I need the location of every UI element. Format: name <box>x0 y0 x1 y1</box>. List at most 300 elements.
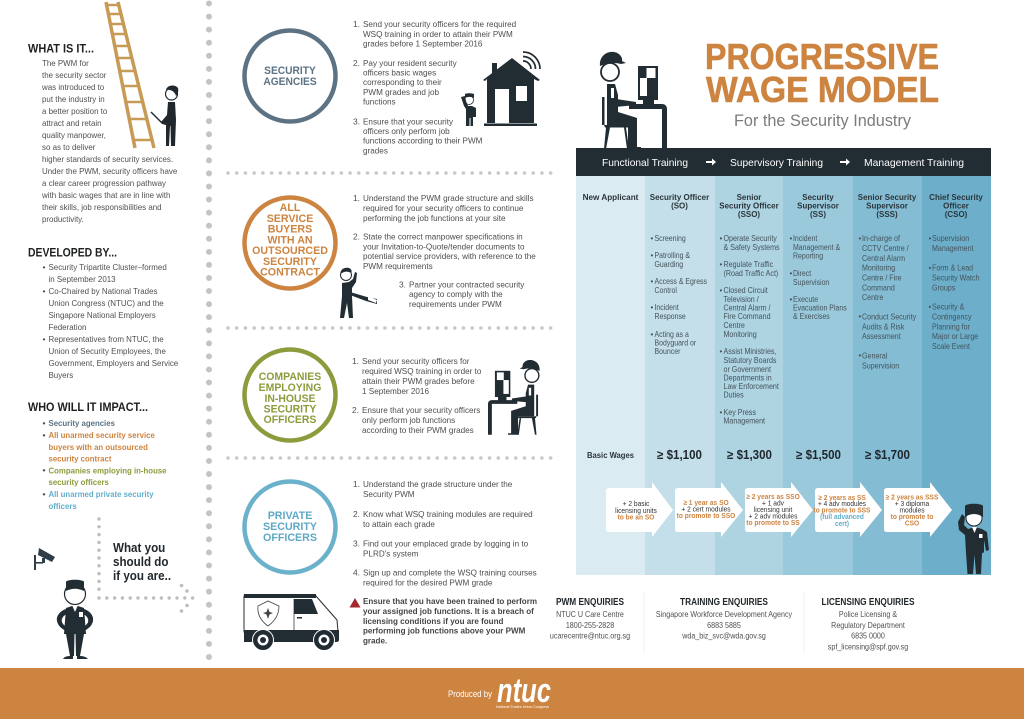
list: senior security officer duties: Closed Circuit <box>724 286 769 295</box>
table column backgrounds <box>576 176 991 575</box>
list: senior security officer duties: Regulate Traffic <box>724 260 773 269</box>
list: senior security supervisor duties: Assessment <box>862 332 902 341</box>
list: security officer duties: • <box>650 234 654 243</box>
header bar: training tracks <box>576 148 991 176</box>
text: security agencies steps: Ensure that your security <box>363 117 454 127</box>
list: chief security officer duties: Supervision <box>932 234 969 243</box>
heading: progressive wage model: PROGRESSIVE <box>705 36 939 77</box>
text: security agencies steps: WSQ training in order to attain their PWM <box>363 30 513 39</box>
text: service buyers steps: Understand the PWM grade structure and skills <box>363 194 534 203</box>
icon: security agencies circle <box>244 30 336 122</box>
panel: title <box>600 36 939 149</box>
text: what is it body: was introduced to <box>41 83 105 92</box>
text: service buyers steps: requirements under PWM <box>409 300 502 309</box>
list: who will it impact: buyers with an outsourced <box>48 443 148 452</box>
icon: guard with pointer beside ladder <box>151 86 178 146</box>
list: senior security officer duties: (Road Traffic Act) <box>724 269 779 278</box>
list: developed by: Union of Security Employees, the <box>48 347 166 356</box>
icon: private officers circle <box>244 482 336 572</box>
column headings: (CSO) <box>945 210 968 219</box>
icon: cctv camera <box>34 548 55 570</box>
text: companies steps: only perform job functions <box>362 416 455 425</box>
text: pwm enquiries: PWM ENQUIRIES <box>556 596 624 607</box>
list: senior security officer duties: Fire Command <box>724 312 771 321</box>
arrow: to security supervisor: ≥ 2 years as SSO <box>746 494 800 501</box>
text: licensing enquiries: Police Licensing & <box>839 609 898 619</box>
arrow: to senior security supervisor: + 4 adv modules <box>818 501 866 508</box>
text: security agencies steps: officers only perform job <box>363 127 450 136</box>
list: security supervisor duties: Direct <box>793 269 812 278</box>
text: service buyers steps: potential service providers, with reference to the <box>363 252 536 261</box>
list: who will it impact: • <box>42 430 46 440</box>
list: senior security supervisor duties: Conduct Security <box>862 312 916 322</box>
list: who will it impact: • <box>42 489 46 499</box>
arrow: to senior security supervisor: (full advanced <box>820 514 864 521</box>
text: subtitle: For the Security Industry <box>734 112 912 130</box>
arrow: to security supervisor: licensing unit <box>754 507 792 514</box>
column headings <box>583 193 983 219</box>
list: chief security officer duties: • <box>928 302 932 312</box>
list: senior security officer duties: & Safety Systems <box>724 243 780 252</box>
text: pwm enquiries <box>550 596 630 641</box>
icon: all service buyers circle: CONTRACT <box>260 266 320 279</box>
list: security officer duties: • <box>650 277 654 286</box>
list: developed by: Federation <box>48 323 87 332</box>
text: training enquiries: Singapore Workforce Development Agency <box>656 609 792 619</box>
list: who will it impact: officers <box>48 502 77 511</box>
text: service buyers steps: required for your security officers to continue <box>363 204 524 213</box>
arrow: dotted path to the right <box>99 519 193 613</box>
list: senior security officer duties: • <box>720 260 722 269</box>
arrow: to chief security officer: ≥ 2 years as SSS <box>886 494 939 502</box>
header bar: training tracks: Management Training <box>864 157 964 169</box>
text: private officers steps <box>353 479 537 588</box>
list: developed by: in September 2013 <box>48 275 116 284</box>
text: companies steps: Ensure that your security officers <box>362 406 480 415</box>
list: senior security officer duties: Assist Ministries, <box>724 347 776 356</box>
list: security officer duties: Acting as a <box>654 330 690 339</box>
arrow: to security supervisor: + 1 adv <box>762 500 784 508</box>
text: licensing enquiries: spf_licensing@spf.gov.sg <box>828 642 908 652</box>
list: senior security officer duties: or Government <box>724 365 772 374</box>
header bar: training tracks: Supervisory Training <box>730 157 823 169</box>
text: private officers steps: required for the desired PWM grade <box>363 578 493 588</box>
list: chief security officer duties: Groups <box>932 283 956 293</box>
arrow: to chief security officer <box>884 482 952 537</box>
icon: private officers circle: OFFICERS <box>263 532 317 544</box>
text: companies steps: 1 September 2016 <box>362 387 429 396</box>
list: who will it impact: All unarmed security service <box>48 431 155 440</box>
text: licensing enquiries: 6835 0000 <box>851 631 885 641</box>
list: senior security supervisor duties <box>858 234 916 371</box>
text: companies steps: 1. <box>352 356 359 366</box>
text: produced by: Produced by <box>448 689 492 700</box>
callout: warning: grade. <box>363 636 387 646</box>
text: private officers steps: 3. <box>353 538 360 548</box>
list: security supervisor duties: Incident <box>793 234 818 243</box>
text: private officers steps: Security PWM <box>363 490 415 499</box>
list: developed by: Representatives from NTUC, the <box>48 335 164 344</box>
list: senior security officer duties: Central Alarm / <box>724 303 771 313</box>
list: security officer duties: Control <box>654 286 677 295</box>
text: security agencies steps: corresponding to their <box>363 78 442 87</box>
row: basic wages: ≥ $1,100 <box>657 448 702 462</box>
text: private officers steps: Sign up and complete the WSQ training courses <box>363 568 537 578</box>
callout: warning: Ensure that you have been trained to perform <box>363 597 537 606</box>
list: security supervisor duties: Evacuation Plans <box>793 303 847 313</box>
text: what is it body: with basic wages that are in line with <box>41 191 171 200</box>
callout: warning <box>350 597 537 646</box>
row: basic wages <box>587 448 910 462</box>
list: senior security supervisor duties: CCTV Centre / <box>862 244 909 253</box>
logo: ntuc: ntuc <box>497 672 551 710</box>
arrow: to security supervisor: to promote to SS <box>746 520 800 527</box>
logo: ntuc: National Trades Union Congress <box>496 704 549 709</box>
text: service buyers steps: performing the job functions at your site <box>363 214 506 223</box>
list: security officer duties: • <box>650 303 654 312</box>
text: companies steps: required WSQ training in order to <box>362 367 482 376</box>
column headings: Senior Security <box>858 193 917 202</box>
list: who will it impact <box>42 418 167 511</box>
panel: companies employing in-house officers <box>244 350 540 440</box>
text: what you should do: if you are.. <box>113 569 171 583</box>
list: security supervisor duties: • <box>790 234 792 243</box>
text: what is it body: so as to deliver <box>42 143 96 152</box>
list: chief security officer duties <box>928 234 980 351</box>
text: what you should do: What you <box>113 541 165 555</box>
list: senior security officer duties <box>720 234 780 426</box>
icon: saluting guard <box>461 93 476 126</box>
text: what you should do <box>113 541 171 583</box>
icon: guard with metal detector <box>340 268 377 318</box>
text: training enquiries: TRAINING ENQUIRIES <box>680 596 768 607</box>
panel: enquiries <box>550 592 914 652</box>
text: pwm enquiries: 1800-255-2828 <box>566 620 615 630</box>
list: chief security officer duties: Security & <box>932 302 964 312</box>
text: private officers steps: PLRD's system <box>363 549 418 559</box>
list: developed by <box>42 262 179 380</box>
list: chief security officer duties: Scale Event <box>932 342 971 351</box>
arrow: to security supervisor <box>745 482 813 537</box>
callout: warning: licensing conditions if you are found <box>363 617 503 626</box>
list: chief security officer duties: Major or Large <box>932 332 978 341</box>
icon: companies circle <box>244 350 336 440</box>
heading: developed by: DEVELOPED BY... <box>28 248 117 260</box>
column headings: New Applicant <box>583 193 639 202</box>
text: companies steps <box>352 356 482 435</box>
list: senior security supervisor duties: Monitoring <box>862 263 895 273</box>
list: developed by: Singapore National Employers <box>48 311 156 320</box>
text: licensing enquiries: LICENSING ENQUIRIES <box>822 596 914 607</box>
list: security officer duties: Bouncer <box>654 347 681 356</box>
arrow: to chief security officer: + 3 diploma <box>895 501 929 508</box>
text: companies steps: according to their PWM grades <box>362 426 474 435</box>
text: security agencies steps: Send your security officers for the required <box>363 20 517 29</box>
list: senior security officer duties: • <box>720 408 722 417</box>
list: senior security supervisor duties: Command <box>862 283 895 293</box>
icon: house with wifi <box>483 52 540 126</box>
text: licensing enquiries: Regulatory Department <box>831 620 906 630</box>
list: security officer duties: Screening <box>654 234 686 243</box>
column headings: (SSO) <box>738 210 760 219</box>
list: security officer duties <box>650 234 707 356</box>
text: security agencies steps: PWM grades and job <box>363 88 439 97</box>
arrow: to security officer <box>606 482 673 537</box>
icon: all service buyers circle: OUTSOURCED <box>252 245 328 257</box>
list: senior security officer duties: • <box>720 286 722 295</box>
text: service buyers steps <box>353 193 536 309</box>
arrow: to chief security officer: modules <box>899 507 925 515</box>
icon: companies circle: SECURITY <box>264 403 316 416</box>
list: developed by: • <box>42 334 46 344</box>
list: developed by: • <box>42 286 46 296</box>
icon: seated guard at monitor <box>488 360 540 435</box>
row: basic wages: ≥ $1,700 <box>865 448 910 462</box>
column headings: Security Officer <box>650 193 710 202</box>
text: private officers steps: Understand the grade structure under the <box>363 480 513 489</box>
text: security agencies steps: functions according to their PWM <box>363 136 483 146</box>
list: who will it impact: • <box>42 418 46 428</box>
text: what is it body: a clear career progression pathway <box>42 179 167 188</box>
icon: all service buyers circle: SERVICE <box>267 213 313 225</box>
list: who will it impact: All unarmed private security <box>48 490 154 499</box>
text: what is it body: productivity. <box>42 215 84 224</box>
list: senior security supervisor duties: Central Alarm <box>862 254 905 263</box>
icon: companies circle: OFFICERS <box>264 414 316 426</box>
list: security supervisor duties: Management & <box>793 243 840 252</box>
column headings: (SSS) <box>876 210 898 219</box>
list: chief security officer duties: Management <box>932 244 974 253</box>
text: what is it body: Under the PWM, security officers have <box>42 167 178 176</box>
list: chief security officer duties: • <box>928 234 932 243</box>
text: service buyers steps: your Invitation-to-Quote/tender documents to <box>363 242 525 252</box>
column headings: Security <box>802 193 834 202</box>
list: who will it impact: Companies employing in-house <box>48 466 167 476</box>
header bar: training tracks: Functional Training <box>602 157 688 169</box>
arrow: to senior security supervisor: ≥ 2 years as SS <box>818 495 866 502</box>
arrow: to security officer: to be an SO <box>618 514 655 522</box>
column headings: (SS) <box>810 210 826 219</box>
list: security officer duties: Bodyguard or <box>654 338 697 348</box>
text: security agencies steps: grades before 1 September 2016 <box>363 39 483 49</box>
list: senior security officer duties: Television / <box>724 295 760 304</box>
list: senior security officer duties: • <box>720 347 722 356</box>
icon: companies circle: COMPANIES <box>259 371 321 383</box>
list: chief security officer duties: Planning for <box>932 322 970 332</box>
list: senior security officer duties: Duties <box>724 390 744 400</box>
panel: security agencies <box>244 19 540 156</box>
icon: private officers circle: SECURITY <box>263 521 318 533</box>
text: security agencies steps: officers basic wages <box>363 68 436 78</box>
column headings: (SO) <box>671 201 688 211</box>
list: security supervisor duties: • <box>790 269 792 278</box>
text: service buyers steps: PWM requirements <box>363 262 433 271</box>
arrow: to security officer: licensing units <box>615 508 657 515</box>
text: private officers steps: Find out your emplaced grade by logging in to <box>363 539 529 549</box>
list: senior security supervisor duties: Supervision <box>862 361 899 371</box>
list: security officer duties: Patrolling & <box>654 251 690 260</box>
list: senior security supervisor duties: General <box>862 351 888 361</box>
list: senior security officer duties: Departments in <box>724 373 772 383</box>
arrow: to senior security supervisor: cert) <box>835 521 849 528</box>
text: what is it body: put the industry in <box>42 95 105 104</box>
icon: companies circle: IN-HOUSE <box>264 393 316 405</box>
icon: all service buyers circle: ALL <box>280 202 301 214</box>
list: security officer duties: Guarding <box>654 260 683 269</box>
icon: ladder <box>106 2 154 148</box>
text: pwm enquiries: NTUC U Care Centre <box>556 609 624 619</box>
icon: companies circle: EMPLOYING <box>259 382 321 394</box>
text: security agencies steps: 2. <box>353 58 360 68</box>
panel: career progression table <box>576 148 991 575</box>
text: security agencies steps: functions <box>363 97 396 107</box>
list: senior security supervisor duties: • <box>858 234 862 243</box>
text: service buyers steps: Partner your contracted security <box>409 280 525 290</box>
column headings: Security Officer <box>719 201 779 211</box>
arrow: to chief security officer: to promote to <box>891 514 934 521</box>
arrow: to security supervisor: + 2 adv modules <box>749 513 798 521</box>
list: security officer duties: • <box>650 251 654 260</box>
column headings: Chief Security <box>929 193 983 202</box>
text: private officers steps: 1. <box>353 479 360 489</box>
text: private officers steps: to attain each grade <box>363 520 435 529</box>
list: security supervisor duties: & Exercises <box>793 312 830 321</box>
list: senior security officer duties: Centre <box>724 321 745 330</box>
row: basic wages: Basic Wages <box>587 450 634 460</box>
arrow: to senior security officer: + 2 cert modules <box>681 506 731 514</box>
arrow: to senior security officer: to promote to SSO <box>677 513 736 520</box>
list: senior security supervisor duties: • <box>858 312 862 321</box>
list: chief security officer duties: Security Watch <box>932 273 980 283</box>
text: companies steps: 2. <box>352 405 359 415</box>
column headings: Supervisor <box>797 201 840 211</box>
heading: progressive wage model: WAGE MODEL <box>706 69 939 110</box>
icon: security agencies circle: SECURITY <box>264 65 316 77</box>
arrow: to senior security officer: ≥ 1 year as SO <box>683 500 729 507</box>
arrow: to security officer: + 2 basic <box>623 501 650 508</box>
list: senior security supervisor duties: Centre <box>862 293 883 302</box>
callout: warning: your assigned job functions. It is a breach of <box>363 607 534 616</box>
text: security agencies steps: Pay your resident security <box>363 59 457 68</box>
text: private officers steps: 2. <box>353 509 360 519</box>
text: security agencies steps <box>353 19 517 156</box>
list: security supervisor duties <box>790 234 847 321</box>
list: developed by: • <box>42 262 46 272</box>
icon: guard with radio <box>958 504 989 574</box>
arrow: to senior security officer <box>675 482 743 537</box>
text: what is it body <box>41 59 178 224</box>
list: chief security officer duties: Contingency <box>932 312 972 322</box>
list: developed by: Buyers <box>48 371 73 380</box>
list: senior security officer duties: Operate Security <box>724 234 777 243</box>
list: senior security supervisor duties: • <box>858 351 862 360</box>
text: companies steps: Send your security officers for <box>362 357 470 366</box>
text: what is it body: The PWM for <box>42 59 89 68</box>
column headings: Officer <box>943 201 970 211</box>
list: security supervisor duties: Execute <box>793 295 818 304</box>
list: security officer duties: Access & Egress <box>654 277 707 286</box>
list: senior security supervisor duties: Centre / Fire <box>862 273 902 283</box>
callout: warning: performing job functions above your PWM <box>363 626 525 636</box>
text: training enquiries <box>656 596 792 641</box>
icon: security van <box>244 594 339 650</box>
row: basic wages: ≥ $1,300 <box>727 448 772 462</box>
text: what is it body: the security sector <box>42 71 107 80</box>
list: senior security officer duties: Key Press <box>724 408 756 417</box>
text: service buyers steps: agency to comply with the <box>409 290 503 299</box>
list: senior security supervisor duties: Audits & Risk <box>862 322 904 332</box>
text: training enquiries: wda_biz_svc@wda.gov.sg <box>681 631 766 641</box>
heading: what is it: WHAT IS IT... <box>28 44 94 56</box>
panel: private security officers <box>244 479 537 650</box>
text: companies steps: attain their PWM grades before <box>362 377 475 386</box>
text: training enquiries: 6883 5885 <box>707 620 741 630</box>
text: security agencies steps: 3. <box>353 116 360 126</box>
row: basic wages: ≥ $1,500 <box>796 448 841 462</box>
text: private officers steps: Know what WSQ training modules are required <box>363 510 533 519</box>
text: what is it body: higher standards of security services. <box>42 155 173 164</box>
list: chief security officer duties: • <box>928 264 932 272</box>
text: security agencies steps: grades <box>363 146 388 156</box>
list: senior security officer duties: Management <box>724 416 766 426</box>
text: what is it body: quality manpower, <box>42 131 106 140</box>
arrow: to senior security supervisor: to promote to SSS <box>814 507 871 515</box>
text: licensing enquiries <box>822 596 914 652</box>
list: who will it impact: • <box>42 465 46 475</box>
icon: private officers circle: PRIVATE <box>268 510 312 522</box>
list: senior security officer duties: • <box>720 234 722 243</box>
text: service buyers steps: State the correct manpower specifications in <box>363 232 523 242</box>
text: security agencies steps: 1. <box>353 19 360 29</box>
icon: standing guard <box>57 580 93 659</box>
list: security supervisor duties: Supervision <box>793 278 829 287</box>
icon: security agencies circle: AGENCIES <box>263 76 317 88</box>
column headings: Supervisor <box>866 201 909 211</box>
list: senior security officer duties: Law Enforcement <box>724 382 780 391</box>
icon: all service buyers circle: BUYERS <box>268 223 312 236</box>
icon: all service buyers circle <box>244 198 336 288</box>
panel: footer <box>0 668 1024 719</box>
column headings: Senior <box>737 193 762 202</box>
list: who will it impact: security contract <box>48 454 112 464</box>
panel: all service buyers <box>244 193 536 318</box>
panel: left column introduction <box>28 2 193 659</box>
list: security officer duties: Incident <box>654 303 680 312</box>
text: what is it body: their skills, job responsibilities and <box>42 203 162 212</box>
list: chief security officer duties: Form & Lead <box>932 263 973 273</box>
list: senior security officer duties: Statutory Boards <box>724 356 777 365</box>
icon: all service buyers circle: SECURITY <box>263 256 318 268</box>
icon: seated guard at monitor <box>600 52 667 149</box>
list: security officer duties: • <box>650 330 654 339</box>
list: senior security supervisor duties: In-charge of <box>862 234 901 243</box>
list: who will it impact: security officers <box>48 478 109 487</box>
icon: all service buyers circle: WITH AN <box>267 234 313 247</box>
text: service buyers steps: 2. <box>353 232 360 242</box>
arrow: to senior security supervisor <box>814 482 882 537</box>
list: developed by: Security Tripartite Cluster–formed <box>48 263 167 272</box>
list: developed by: Union Congress (NTUC) and the <box>48 299 164 308</box>
text: service buyers steps: 3. <box>399 280 406 290</box>
list: senior security officer duties: Monitoring <box>724 330 757 339</box>
text: what is it body: attract and retain <box>42 119 102 128</box>
list: security supervisor duties: • <box>790 295 792 304</box>
text: service buyers steps: 1. <box>353 193 360 203</box>
text: pwm enquiries: ucarecentre@ntuc.org.sg <box>550 631 630 641</box>
text: what is it body: a better position to <box>42 107 108 116</box>
list: developed by: Government, Employers and Service <box>48 359 179 368</box>
list: security supervisor duties: Reporting <box>793 251 823 261</box>
